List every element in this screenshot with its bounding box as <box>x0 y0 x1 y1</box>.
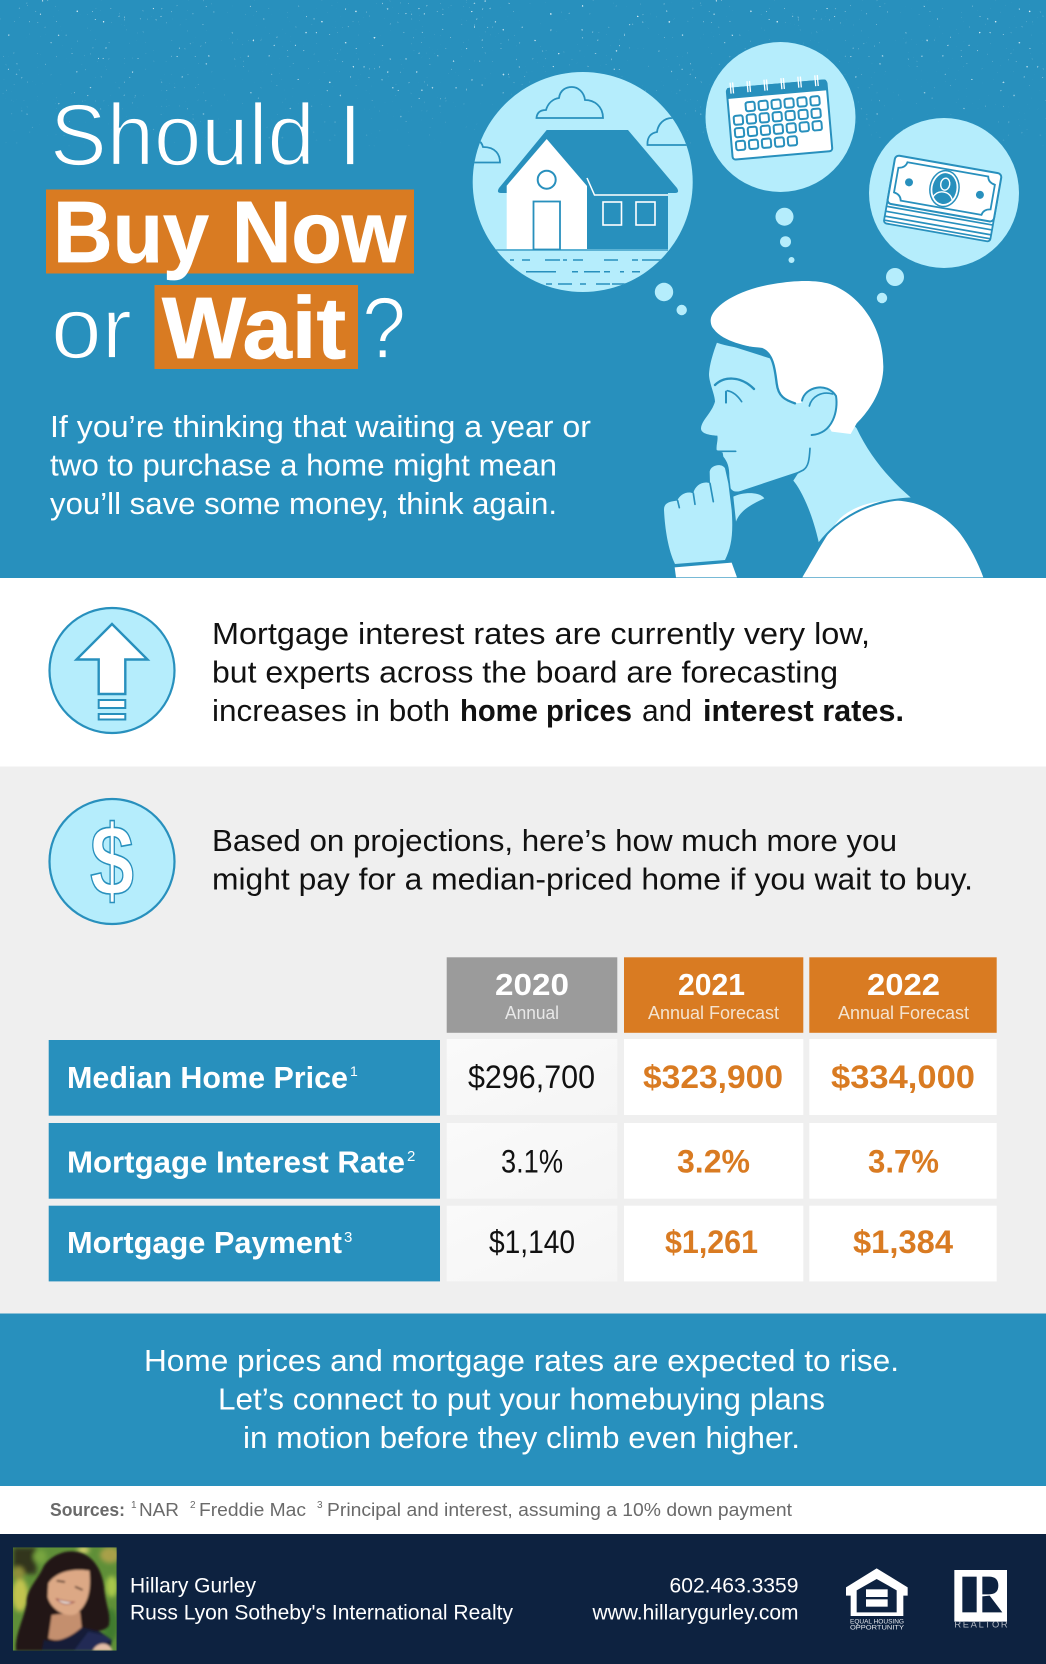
illustration: thinking man <box>664 281 983 577</box>
column header 2021 <box>624 957 803 1033</box>
thought bubble dots <box>655 208 904 315</box>
sources line <box>0 1486 1046 1534</box>
panel: call to action: Home prices and mortgage rates are expected to rise. <box>144 1344 899 1378</box>
row: mortgage payment: $1,384 <box>853 1224 953 1260</box>
sources line: Sources: <box>50 1500 125 1520</box>
subtitle text <box>50 410 591 521</box>
panel: hero <box>0 0 1046 578</box>
icon: house thought bubble <box>460 72 700 292</box>
sources line: 2 <box>190 1500 196 1511</box>
logo: realtor: REALTOR <box>954 1619 1008 1629</box>
title: or <box>51 280 132 377</box>
row: mortgage interest rate: 2 <box>407 1148 415 1165</box>
sources line: 3 <box>317 1500 323 1511</box>
subtitle text: you’ll save some money, think again. <box>50 487 557 521</box>
subtitle text: two to purchase a home might mean <box>50 448 557 482</box>
text: projections intro <box>212 824 973 896</box>
row: mortgage payment: $1,140 <box>489 1224 575 1260</box>
sources line: Freddie Mac <box>199 1500 306 1520</box>
row: median home price: Median Home Price <box>67 1060 348 1095</box>
column header 2022: 2022 <box>867 967 940 1002</box>
panel: mortgage rates note <box>0 578 1046 766</box>
title: Wait <box>162 280 346 377</box>
row: mortgage interest rate: 3.7% <box>868 1144 939 1180</box>
title: Buy Now <box>53 184 406 281</box>
panel: projections table section <box>0 766 1046 1314</box>
logo: equal housing opportunity: OPPORTUNITY <box>850 1625 905 1632</box>
logo: equal housing opportunity: EQUAL HOUSING <box>850 1619 904 1626</box>
row: mortgage interest rate: Mortgage Interest Rate <box>67 1144 405 1180</box>
column header 2021: Annual Forecast <box>648 1003 779 1023</box>
row: mortgage payment: $1,261 <box>665 1224 758 1260</box>
icon: dollar sign <box>50 799 174 924</box>
column header 2022: Annual Forecast <box>838 1003 969 1023</box>
title <box>46 87 414 377</box>
icon: calendar thought bubble <box>706 42 856 192</box>
sources line: 1 <box>131 1500 137 1511</box>
icon: up arrow <box>50 608 174 733</box>
row: median home price: $323,900 <box>643 1059 783 1095</box>
text: rates forecast: Mortgage interest rates are currently very low, <box>212 617 870 651</box>
text: projections intro: Based on projections, here’s how much more you <box>212 824 897 858</box>
row: mortgage interest rate: 3.1% <box>501 1144 563 1180</box>
table: price projections <box>49 957 997 1281</box>
agent photo <box>12 1547 120 1651</box>
agent name and company <box>130 1574 513 1624</box>
text: rates forecast: and <box>642 694 692 728</box>
text: rates forecast: interest rates. <box>703 694 904 728</box>
text: rates forecast: home prices <box>460 694 632 728</box>
column header 2022 <box>809 957 997 1033</box>
row: median home price: $334,000 <box>831 1059 975 1095</box>
row: mortgage payment: 3 <box>344 1229 352 1246</box>
text: rates forecast: increases in both <box>212 694 450 728</box>
agent name and company: Russ Lyon Sotheby's International Realty <box>130 1602 513 1624</box>
row: mortgage payment <box>49 1206 997 1281</box>
sources line: NAR <box>139 1500 179 1520</box>
agent contact <box>592 1574 798 1624</box>
title: ? <box>362 280 406 377</box>
row: median home price: 1 <box>350 1063 358 1079</box>
row: mortgage interest rate <box>49 1123 997 1199</box>
column header 2021: 2021 <box>678 967 745 1002</box>
panel: agent footer <box>0 1534 1046 1664</box>
panel: call to action: in motion before they climb even higher. <box>243 1421 800 1455</box>
row: median home price: $296,700 <box>468 1059 595 1095</box>
column header 2020: Annual <box>505 1003 559 1023</box>
logo: realtor <box>954 1570 1008 1629</box>
title: Should I <box>50 87 362 184</box>
agent contact: 602.463.3359 <box>670 1574 798 1598</box>
icon: dollar sign: $ <box>90 805 134 917</box>
logo: equal housing opportunity <box>846 1568 908 1632</box>
agent name and company: Hillary Gurley <box>130 1574 256 1598</box>
text: rates forecast <box>212 617 904 728</box>
column header 2020: 2020 <box>495 967 569 1002</box>
row: mortgage interest rate: 3.2% <box>677 1144 750 1180</box>
row: mortgage payment: Mortgage Payment <box>67 1225 342 1260</box>
subtitle text: If you’re thinking that waiting a year or <box>50 410 591 444</box>
column header 2020 <box>447 957 617 1033</box>
agent contact: www.hillarygurley.com <box>592 1602 798 1624</box>
row: median home price <box>49 1039 997 1116</box>
icon: money thought bubble <box>869 118 1019 268</box>
panel: call to action <box>0 1314 1046 1486</box>
text: projections intro: might pay for a median-priced home if you wait to buy. <box>212 862 973 896</box>
sources line: Principal and interest, assuming a 10% down payment <box>327 1500 792 1520</box>
panel: call to action: Let’s connect to put your homebuying plans <box>218 1382 825 1416</box>
text: rates forecast: but experts across the board are forecasting <box>212 656 838 690</box>
